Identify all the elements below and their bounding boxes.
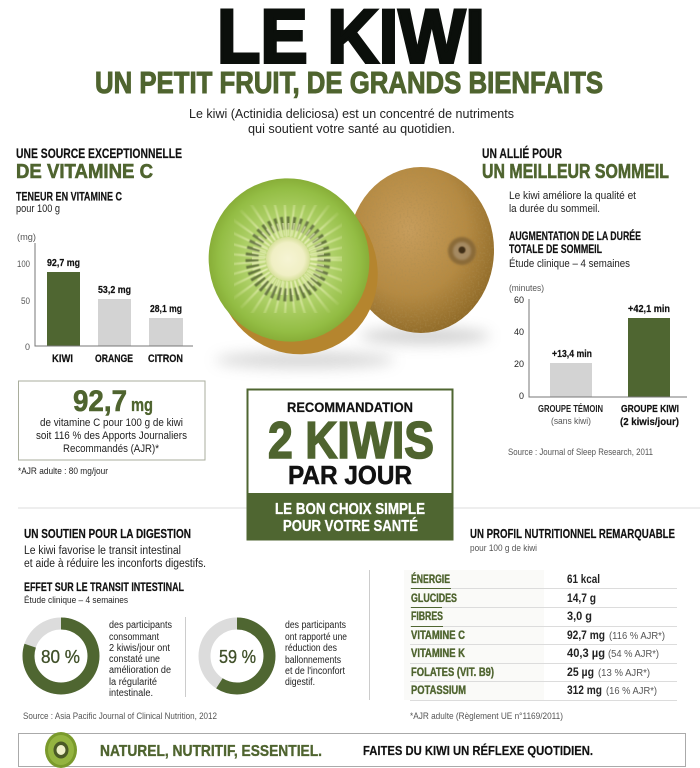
bar chart: vitamin C: CITRON: [148, 353, 183, 365]
table: nutrition: 14,7 g: [567, 593, 596, 605]
bar chart: sleep: 60: [514, 295, 524, 306]
table: nutrition: 3,0 g: [567, 611, 592, 623]
panel: digestion: [23, 527, 347, 722]
callout: 92,7 mg: 92,7: [73, 385, 127, 418]
chart heading: Étude clinique – 4 semaines: [24, 595, 128, 606]
heading: vitamin C: UNE SOURCE EXCEPTIONNELLE: [16, 146, 182, 161]
footnote: AJR: *AJR adulte : 80 mg/jour: [18, 466, 108, 477]
donut chart: 80 %: 80 %: [41, 647, 80, 667]
text: 80 %: consommant: [109, 632, 159, 643]
bar chart: sleep: (minutes): [509, 283, 544, 294]
bar chart: sleep: +42,1 min: [628, 303, 670, 315]
bar chart: vitamin C: 100: [17, 259, 30, 270]
table: nutrition: VITAMINE C: [411, 630, 465, 642]
panel: sleep: [482, 146, 687, 458]
table: nutrition: POTASSIUM: [411, 685, 466, 697]
panel: recommendation: 2 KIWIS: [268, 412, 434, 470]
text: 80 %: amélioration de: [109, 665, 171, 676]
panel: recommendation: PAR JOUR: [288, 460, 412, 490]
text: 59 %: [285, 620, 347, 688]
table: nutrition: (54 % AJR*): [608, 649, 659, 660]
table: nutrition: ÉNERGIE: [411, 573, 450, 586]
subtitle: UN PETIT FRUIT, DE GRANDS BIENFAITS: [95, 65, 603, 100]
heading: digestion: UN SOUTIEN POUR LA DIGESTION: [24, 527, 191, 541]
table: nutrition: 25 µg: [567, 667, 594, 679]
footnote: regulation: *AJR adulte (Règlement UE n°1169/2011): [410, 711, 563, 722]
text: 59 %: réduction des: [285, 643, 337, 654]
text: 59 %: ballonnements: [285, 655, 341, 666]
bar chart: sleep: +13,4 min: [552, 348, 592, 360]
bar chart: sleep: GROUPE TÉMOIN: [538, 402, 603, 415]
text: 80 %: des participants: [109, 620, 172, 631]
bar chart: vitamin C: 92,7 mg: [47, 257, 80, 269]
chart heading: pour 100 g: [16, 203, 60, 215]
table: nutrition: 92,7 mg: [567, 630, 605, 642]
banner: NATUREL, NUTRITIF, ESSENTIEL.: [100, 743, 322, 760]
sleep text: [509, 190, 636, 215]
chart heading: TOTALE DE SOMMEIL: [509, 244, 602, 256]
table: nutrition: 61 kcal: [567, 574, 600, 586]
text: 59 %: des participants: [285, 620, 346, 631]
panel: recommendation: POUR VOTRE SANTÉ: [283, 516, 418, 535]
banner: FAITES DU KIWI UN RÉFLEXE QUOTIDIEN.: [363, 743, 593, 758]
text: 80 %: [109, 620, 172, 699]
callout: 92,7 mg: mg: [131, 395, 153, 415]
bar chart: vitamin C: 0: [25, 342, 30, 353]
bar chart: sleep: 0: [519, 391, 524, 402]
bar chart: vitamin C: 53,2 mg: [98, 284, 131, 296]
table: nutrition: [404, 570, 677, 700]
digestion text: [24, 545, 206, 570]
bar chart: sleep: GROUPE KIWI: [621, 403, 679, 415]
source: sleep: Source : Journal of Sleep Research, 2011: [508, 447, 653, 458]
table: nutrition: 312 mg: [567, 685, 602, 697]
digestion text: Le kiwi favorise le transit intestinal: [24, 545, 181, 557]
donut chart: 80 %: [28, 624, 94, 688]
bar chart: vitamin C: (mg): [17, 232, 36, 243]
intro text: qui soutient votre santé au quotidien.: [248, 122, 455, 136]
table: nutrition: FIBRES: [411, 611, 443, 623]
donut chart: 59 %: [204, 624, 270, 688]
bar chart: vitamin C: 50: [21, 296, 30, 307]
table: nutrition: VITAMINE K: [411, 648, 466, 660]
table: nutrition: (16 % AJR*): [606, 686, 657, 697]
sleep text: Le kiwi améliore la qualité et: [509, 190, 636, 202]
heading: vitamin C: [16, 146, 182, 183]
text: 80 %: la régularité: [109, 677, 157, 688]
bar chart: sleep: (sans kiwi): [551, 416, 591, 427]
banner: [18, 732, 686, 768]
table: nutrition: FOLATES (VIT. B9): [411, 667, 494, 679]
callout: 92,7 mg: de vitamine C pour 100 g de kiwi: [40, 417, 183, 429]
bar chart: sleep: [509, 283, 687, 428]
callout: 92,7 mg: soit 116 % des Apports Journaliers: [36, 430, 187, 442]
heading: sleep: UN ALLIÉ POUR: [482, 146, 562, 161]
bar chart: vitamin C: ORANGE: [95, 353, 133, 365]
callout: 92,7 mg: Recommandés (AJR)*: [63, 443, 160, 455]
digestion text: et aide à réduire les inconforts digestifs.: [24, 558, 206, 570]
chart heading: [16, 192, 122, 215]
panel: recommendation: RECOMMANDATION: [287, 399, 413, 415]
donut chart: 59 %: 59 %: [219, 647, 256, 667]
chart heading: [509, 230, 641, 270]
table: nutrition: (116 % AJR*): [609, 631, 665, 642]
heading: sleep: [482, 146, 669, 183]
text: 59 %: et de l'inconfort: [285, 666, 345, 677]
text: 59 %: ont rapporté une: [285, 632, 347, 643]
table: nutrition: (13 % AJR*): [598, 668, 650, 679]
bar chart: vitamin C: 28,1 mg: [150, 303, 182, 315]
text: 80 %: constaté une: [109, 654, 160, 665]
heading: vitamin C: DE VITAMINE C: [16, 161, 153, 183]
bar chart: sleep: 40: [514, 327, 524, 338]
panel: vitamin C: [16, 146, 205, 477]
table: nutrition: GLUCIDES: [411, 593, 457, 605]
bar chart: sleep: 20: [514, 359, 524, 370]
chart heading: TENEUR EN VITAMINE C: [16, 192, 122, 204]
bar chart: vitamin C: KIWI: [52, 353, 73, 365]
intro text: [189, 107, 514, 136]
heading: nutrition: pour 100 g de kiwi: [470, 543, 537, 554]
text: 59 %: digestif.: [285, 677, 315, 688]
panel: recommendation: [247, 390, 453, 540]
chart heading: AUGMENTATION DE LA DURÉE: [509, 230, 641, 243]
sleep text: la durée du sommeil.: [509, 203, 600, 215]
chart heading: EFFET SUR LE TRANSIT INTESTINAL: [24, 582, 184, 594]
text: 80 %: intestinale.: [109, 688, 153, 699]
panel: nutrition profile: [370, 527, 677, 722]
intro text: Le kiwi (Actinidia deliciosa) est un concentré de nutriments: [189, 107, 514, 121]
image: kiwi fruits: [182, 152, 494, 381]
chart heading: [24, 582, 184, 606]
text: 80 %: 2 kiwis/jour ont: [109, 643, 170, 654]
heading: nutrition: [470, 527, 675, 554]
bar chart: sleep: (2 kiwis/jour): [620, 416, 679, 428]
bar chart: vitamin C: [17, 232, 193, 365]
panel: recommendation: LE BON CHOIX SIMPLE: [275, 501, 425, 518]
chart heading: Étude clinique – 4 semaines: [509, 257, 630, 270]
table: nutrition: 40,3 µg: [567, 648, 605, 660]
source: digestion: Source : Asia Pacific Journal of Clinical Nutrition, 2012: [23, 711, 217, 722]
icon: kiwi slice: [45, 732, 77, 768]
callout: 92,7 mg: [18, 381, 205, 460]
